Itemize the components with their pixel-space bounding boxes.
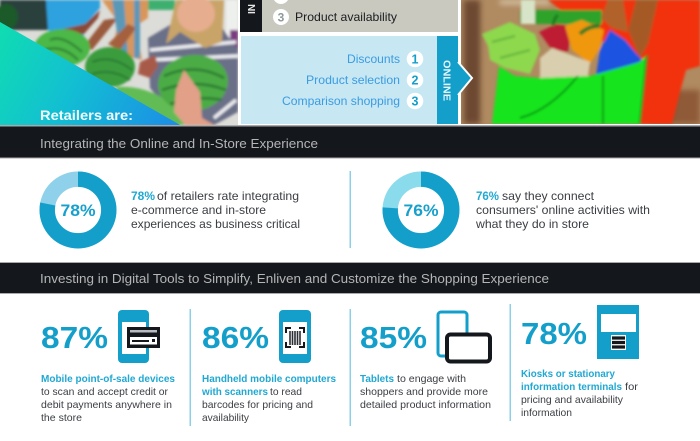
stat: 76 percent connect bbox=[390, 179, 650, 241]
list: discounts bbox=[347, 51, 423, 67]
label: online tab: ONLINE bbox=[440, 60, 452, 101]
list: discounts: Discounts bbox=[347, 52, 400, 66]
stat: 86 percent handheld bbox=[201, 310, 336, 424]
header band: investing bbox=[0, 262, 700, 294]
text: 76% say: say they connect bbox=[502, 189, 595, 203]
rank circle 3 bbox=[273, 9, 289, 25]
label: product availability: Product availability bbox=[295, 10, 397, 24]
rank circle 2 cropped bbox=[273, 0, 289, 4]
stat: 86 percent handheld: 86% bbox=[202, 320, 269, 355]
text: tablets: detailed product information bbox=[360, 399, 491, 411]
text: tablets: Tablets bbox=[360, 373, 394, 385]
list: product selection bbox=[306, 72, 423, 88]
list: product selection: 2 bbox=[412, 74, 419, 88]
list: product selection: Product selection bbox=[306, 73, 400, 87]
icon: phone with credit card bbox=[118, 310, 160, 363]
text: mobile POS: debit payments anywhere in bbox=[41, 399, 172, 411]
text: handheld: to read bbox=[270, 386, 302, 398]
text: 78% of retailers: e-commerce and in-store bbox=[131, 203, 266, 217]
stat: 78 percent kiosks: 78% bbox=[521, 316, 587, 351]
text: kiosks: Kiosks or stationary bbox=[521, 368, 615, 380]
text: kiosks: information bbox=[521, 407, 572, 419]
list: comparison shopping bbox=[282, 93, 423, 109]
icon: tablets bbox=[438, 312, 490, 362]
heading: integrating: Integrating the Online and In-Store Experience bbox=[40, 136, 318, 151]
text: mobile POS: the store bbox=[41, 412, 82, 424]
text: mobile POS: Mobile point-of-sale devices bbox=[41, 373, 175, 385]
text: kiosks: information terminals bbox=[521, 381, 622, 393]
icon: kiosk bbox=[597, 305, 639, 359]
text: tablets: shoppers and provide more bbox=[360, 386, 488, 398]
list: comparison shopping: Comparison shopping bbox=[282, 94, 400, 108]
text: 76% say: consumers' online activities with bbox=[476, 203, 650, 217]
text: handheld: with scanners bbox=[201, 386, 268, 398]
donut: 76% bbox=[390, 179, 452, 241]
list: comparison shopping: 3 bbox=[412, 94, 419, 108]
text: 78% of retailers: 78% bbox=[131, 189, 155, 203]
stat: 85 percent tablets bbox=[360, 312, 491, 411]
text: kiosks bbox=[521, 368, 639, 419]
stat: 78 percent integrating bbox=[47, 179, 300, 241]
text: kiosks: pricing and availability bbox=[521, 394, 624, 406]
panel: in-store ranking bbox=[240, 0, 458, 32]
header band: integrating bbox=[0, 125, 700, 158]
arrow: online pointer bbox=[458, 62, 472, 95]
stat: 87 percent mobile POS bbox=[41, 310, 175, 424]
text: mobile POS bbox=[41, 373, 175, 424]
text: mobile POS: to scan and accept credit or bbox=[41, 386, 168, 398]
list: discounts: 1 bbox=[412, 52, 419, 66]
stat: 85 percent tablets: 85% bbox=[360, 320, 427, 355]
text: kiosks: for bbox=[625, 381, 639, 393]
text: 78% of retailers: of retailers rate integrating bbox=[157, 189, 299, 203]
text: 78% of retailers: experiences as business critical bbox=[131, 217, 300, 231]
photo: green grocery bag bbox=[461, 0, 700, 124]
text: 76% say: what they do in store bbox=[475, 217, 589, 231]
rank circle 3: 3 bbox=[278, 10, 285, 24]
text: 76% say: 76% bbox=[476, 189, 499, 203]
donut: 76%: 76% bbox=[404, 201, 438, 220]
panel: online ranking bbox=[241, 36, 458, 124]
donut: 78%: 78% bbox=[60, 201, 96, 220]
text: handheld bbox=[201, 373, 336, 424]
stat: 78 percent kiosks bbox=[521, 305, 639, 419]
text: tablets bbox=[360, 373, 491, 411]
text: tablets: to engage with bbox=[397, 373, 466, 385]
donut: 78% bbox=[47, 179, 109, 241]
gradient triangle bbox=[0, 22, 182, 126]
photo: children with watermelons bbox=[0, 0, 238, 126]
label: Retailers are: Retailers are: bbox=[40, 107, 133, 123]
text: 76% say bbox=[475, 189, 650, 231]
stat: 87 percent mobile POS: 87% bbox=[41, 320, 108, 355]
text: handheld: barcodes for pricing and bbox=[202, 399, 313, 411]
text: handheld: Handheld mobile computers bbox=[202, 373, 336, 385]
text: 78% of retailers bbox=[131, 189, 300, 231]
text: handheld: availability bbox=[202, 412, 250, 424]
label: in-store tab: IN bbox=[247, 4, 258, 14]
heading: investing: Investing in Digital Tools to Simplify, Enliven and Customize the Shopping Experience bbox=[40, 271, 549, 286]
icon: phone with barcode scanner bbox=[279, 310, 311, 363]
